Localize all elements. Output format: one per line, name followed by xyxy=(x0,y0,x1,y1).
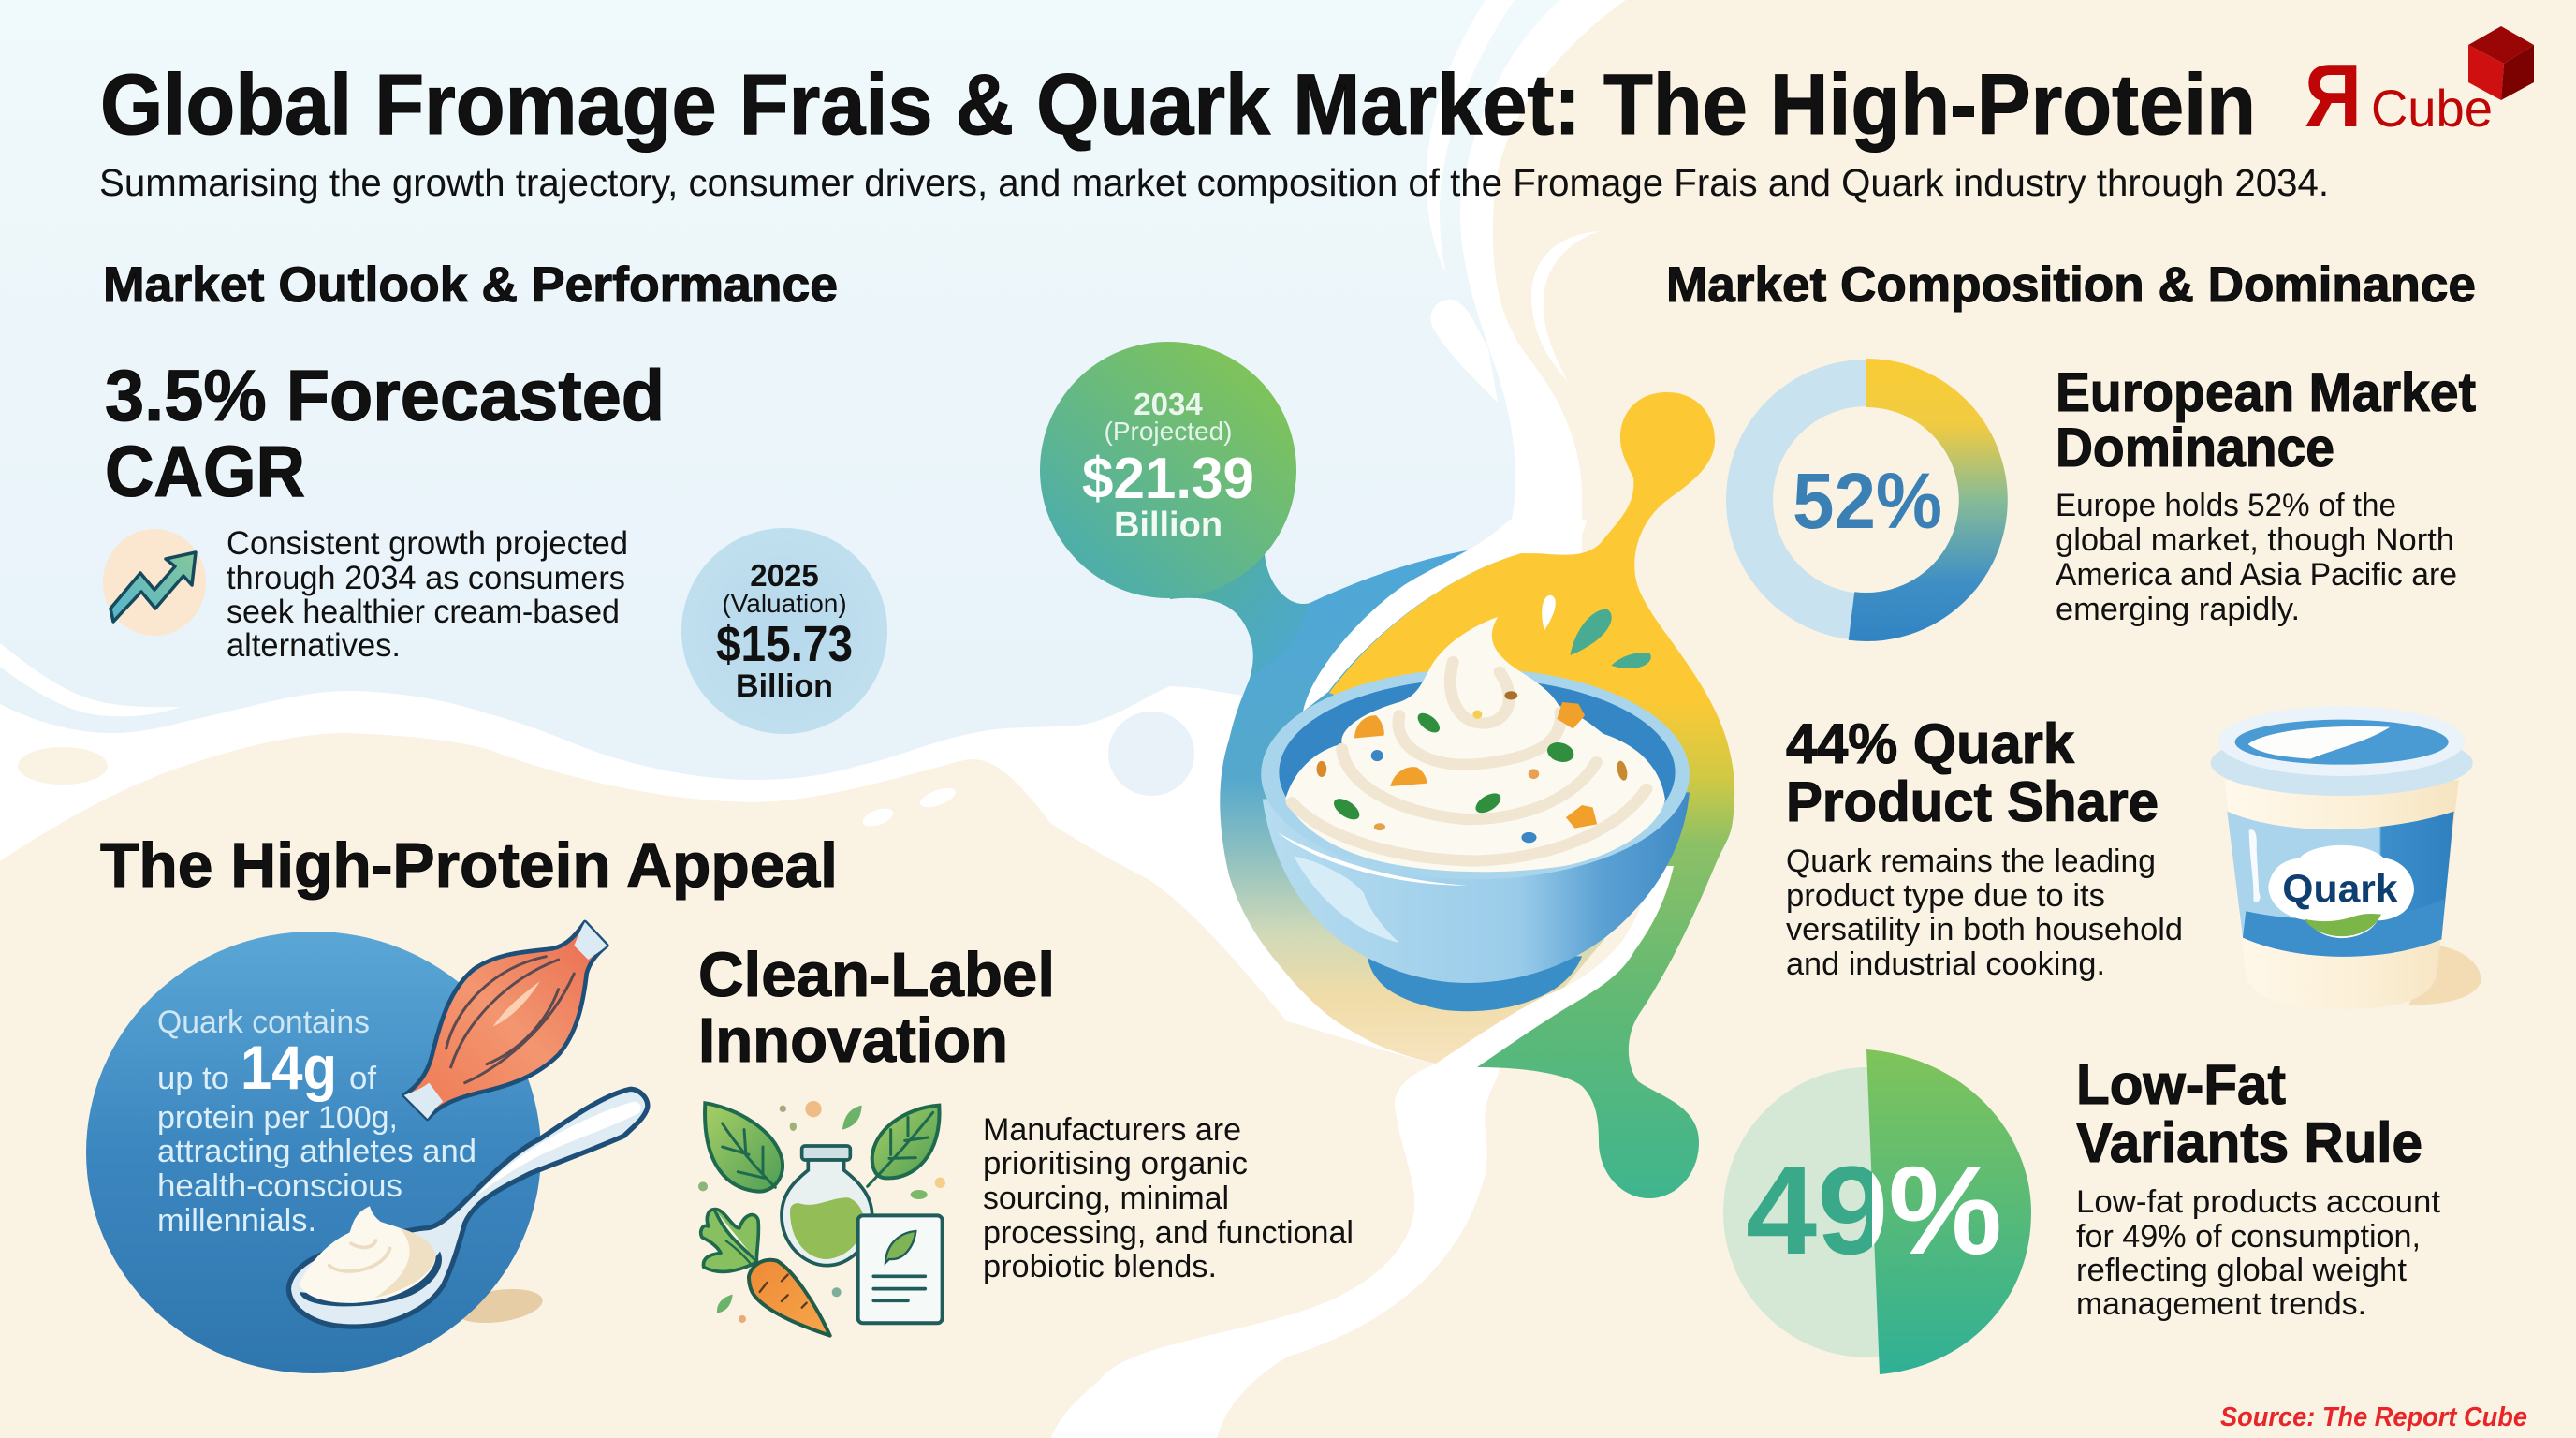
text: CAGR description: seek healthier cream-based xyxy=(227,594,620,630)
central splash: teal neck to the 2034 bubble xyxy=(1170,548,1310,679)
central splash: yellow to green flow with blobs xyxy=(1329,392,1734,1198)
chart: 52% donut xyxy=(1749,383,1983,617)
text: CAGR description: through 2034 as consumers xyxy=(227,560,625,596)
chart: 49% pie xyxy=(1723,1049,2031,1374)
bowl highlight xyxy=(1294,856,1399,943)
bubble: 2025 valuation: (Valuation) xyxy=(722,589,847,618)
logo: The Report Cube xyxy=(2305,26,2534,146)
bubble: 2025 valuation xyxy=(681,528,887,734)
text: europe description: Europe holds 52% of the xyxy=(2056,488,2396,523)
bubble: 2034 projected: 2034 xyxy=(1134,387,1203,421)
text: protein facts: up to xyxy=(157,1061,229,1096)
accents xyxy=(698,1101,945,1323)
background: cream blob in milk xyxy=(18,747,108,785)
heading: low-fat variants: Variants Rule xyxy=(2076,1111,2422,1174)
title: Global Fromage Frais & Quark Market: The High-Protein xyxy=(100,57,2256,153)
text: protein facts: attracting athletes and xyxy=(157,1134,476,1169)
text: protein facts: protein per 100g, xyxy=(157,1100,398,1136)
text: clean-label description xyxy=(983,1112,1354,1284)
heading: quark share: 44% Quark xyxy=(1786,712,2075,775)
heading: low-fat variants xyxy=(2076,1053,2422,1174)
bubble: 2034 projected xyxy=(1040,342,1296,598)
text: europe description: global market, though North xyxy=(2056,522,2454,558)
flask xyxy=(782,1146,872,1266)
text: low-fat description: management trends. xyxy=(2076,1286,2366,1322)
text: protein facts: 14g xyxy=(241,1033,337,1102)
bubble: 2025 valuation: 2025 xyxy=(750,558,819,593)
text: quark description: versatility in both household xyxy=(1786,912,2183,947)
bowl of quark xyxy=(1261,595,1690,1011)
icon: muscle xyxy=(404,922,607,1119)
heading: high-protein appeal: The High-Protein Appeal xyxy=(100,830,838,901)
bowl foot xyxy=(1367,956,1582,1011)
whipped quark xyxy=(1285,617,1665,872)
heading: CAGR: 3.5% Forecasted xyxy=(105,356,665,436)
document xyxy=(858,1215,943,1323)
text: quark description: and industrial cooking. xyxy=(1786,946,2105,982)
text: quark description: Quark remains the leading xyxy=(1786,844,2156,879)
text: protein facts: millennials. xyxy=(157,1203,316,1239)
bubble: 2034 projected: $21.39 xyxy=(1082,447,1254,511)
background: pale blue sky area xyxy=(0,0,1560,780)
heading: market outlook: Market Outlook & Performance xyxy=(103,257,838,313)
central splash: pale inner blob xyxy=(1108,712,1194,796)
left leaf xyxy=(705,1103,783,1192)
text: low-fat description: reflecting global weight xyxy=(2076,1253,2408,1288)
heading: clean-label innovation: Clean-Label xyxy=(698,940,1055,1010)
background: white milk swirl xyxy=(0,0,1626,1438)
icon: quark tub: Quark xyxy=(2282,867,2399,910)
text: low-fat description: Low-fat products account xyxy=(2076,1184,2441,1220)
text: clean-label description: Manufacturers are xyxy=(983,1112,1241,1148)
heading: CAGR xyxy=(105,356,665,512)
spoon shadow xyxy=(453,1284,545,1328)
icon: leaves, flask, carrot and label xyxy=(698,1101,945,1336)
logo cube xyxy=(2468,26,2534,100)
chart: 49% pie: 49% xyxy=(1746,1141,2002,1281)
heading: clean-label innovation: Innovation xyxy=(698,1005,1008,1076)
rim highlight xyxy=(1278,832,1468,886)
central splash: blue to tan arc xyxy=(1170,550,1685,1067)
text: clean-label description: prioritising organic xyxy=(983,1146,1248,1181)
background: milk spur xyxy=(1431,300,1498,403)
text: clean-label description: processing, and functional xyxy=(983,1215,1354,1251)
toppings xyxy=(1317,691,1629,843)
icon: spoon with quark xyxy=(288,1089,648,1327)
background: thin white crescent on cream xyxy=(1531,231,1601,382)
text: europe description: America and Asia Pacific are xyxy=(2056,557,2457,593)
heading: european dominance: Dominance xyxy=(2056,418,2334,478)
bubble: 2034 projected: Billion xyxy=(1114,506,1222,545)
heading: clean-label innovation xyxy=(698,940,1055,1076)
text: quark description xyxy=(1786,844,2183,982)
text: protein facts xyxy=(157,1005,476,1239)
heading: quark share: Product Share xyxy=(1786,770,2159,833)
bubble: 2025 valuation: $15.73 xyxy=(716,616,853,672)
text: europe description xyxy=(2056,488,2457,627)
text: low-fat description: for 49% of consumption, xyxy=(2076,1219,2421,1255)
text: quark description: product type due to its xyxy=(1786,878,2105,914)
bubble: 2025 valuation: Billion xyxy=(736,668,833,704)
cream swirl shading xyxy=(1292,662,1647,861)
text: CAGR description: Consistent growth projected xyxy=(227,525,628,562)
icon: quark tub xyxy=(2211,706,2481,1009)
text: CAGR description: alternatives. xyxy=(227,627,401,664)
heading: market composition: Market Composition & Dominance xyxy=(1666,257,2476,313)
bowl interior xyxy=(1279,679,1676,866)
text: clean-label description: probiotic blends. xyxy=(983,1249,1217,1284)
heading: quark share xyxy=(1786,712,2159,833)
heading: CAGR: CAGR xyxy=(105,432,305,512)
tub badge xyxy=(2268,845,2414,938)
background: white strip near top xyxy=(1427,0,1515,273)
logo lettering: Я xyxy=(2305,46,2362,146)
central splash: white band under bowl xyxy=(1436,866,1674,1067)
heading: european dominance: European Market xyxy=(2056,362,2476,423)
right leaf xyxy=(868,1106,940,1186)
spoonful of quark xyxy=(300,1206,436,1303)
text: CAGR description xyxy=(227,525,628,664)
text: protein facts: of xyxy=(349,1061,377,1096)
droplets xyxy=(1542,595,1556,630)
heading: european dominance xyxy=(2056,362,2476,478)
tub lid xyxy=(2211,730,2473,796)
background: white strip over blue, upper left curl xyxy=(0,643,180,716)
background: milk droplets xyxy=(860,785,959,829)
panel: protein circle xyxy=(86,932,541,1373)
text: low-fat description xyxy=(2076,1184,2441,1322)
text: clean-label description: sourcing, minimal xyxy=(983,1181,1229,1216)
heading: low-fat variants: Low-Fat xyxy=(2076,1053,2286,1116)
icon: growth arrow xyxy=(103,529,206,636)
bubble: 2034 projected: (Projected) xyxy=(1105,417,1232,446)
subtitle: Summarising the growth trajectory, consumer drivers, and market composition of the Fromage Frais and Quark industry through 2034. xyxy=(99,161,2329,204)
source note: Source: The Report Cube xyxy=(2220,1402,2527,1432)
bowl rim xyxy=(1261,668,1690,879)
central splash: white band over bowl top xyxy=(1303,520,1587,712)
bowl body xyxy=(1263,792,1690,983)
text: protein facts: health-conscious xyxy=(157,1168,402,1204)
carrot xyxy=(701,1210,830,1336)
logo: The Report Cube: Cube xyxy=(2371,79,2493,138)
text: europe description: emerging rapidly. xyxy=(2056,592,2300,627)
chart: 52% donut: 52% xyxy=(1793,457,1942,545)
text: protein facts: Quark contains xyxy=(157,1005,370,1040)
background: lower left cream field xyxy=(0,733,1436,1438)
